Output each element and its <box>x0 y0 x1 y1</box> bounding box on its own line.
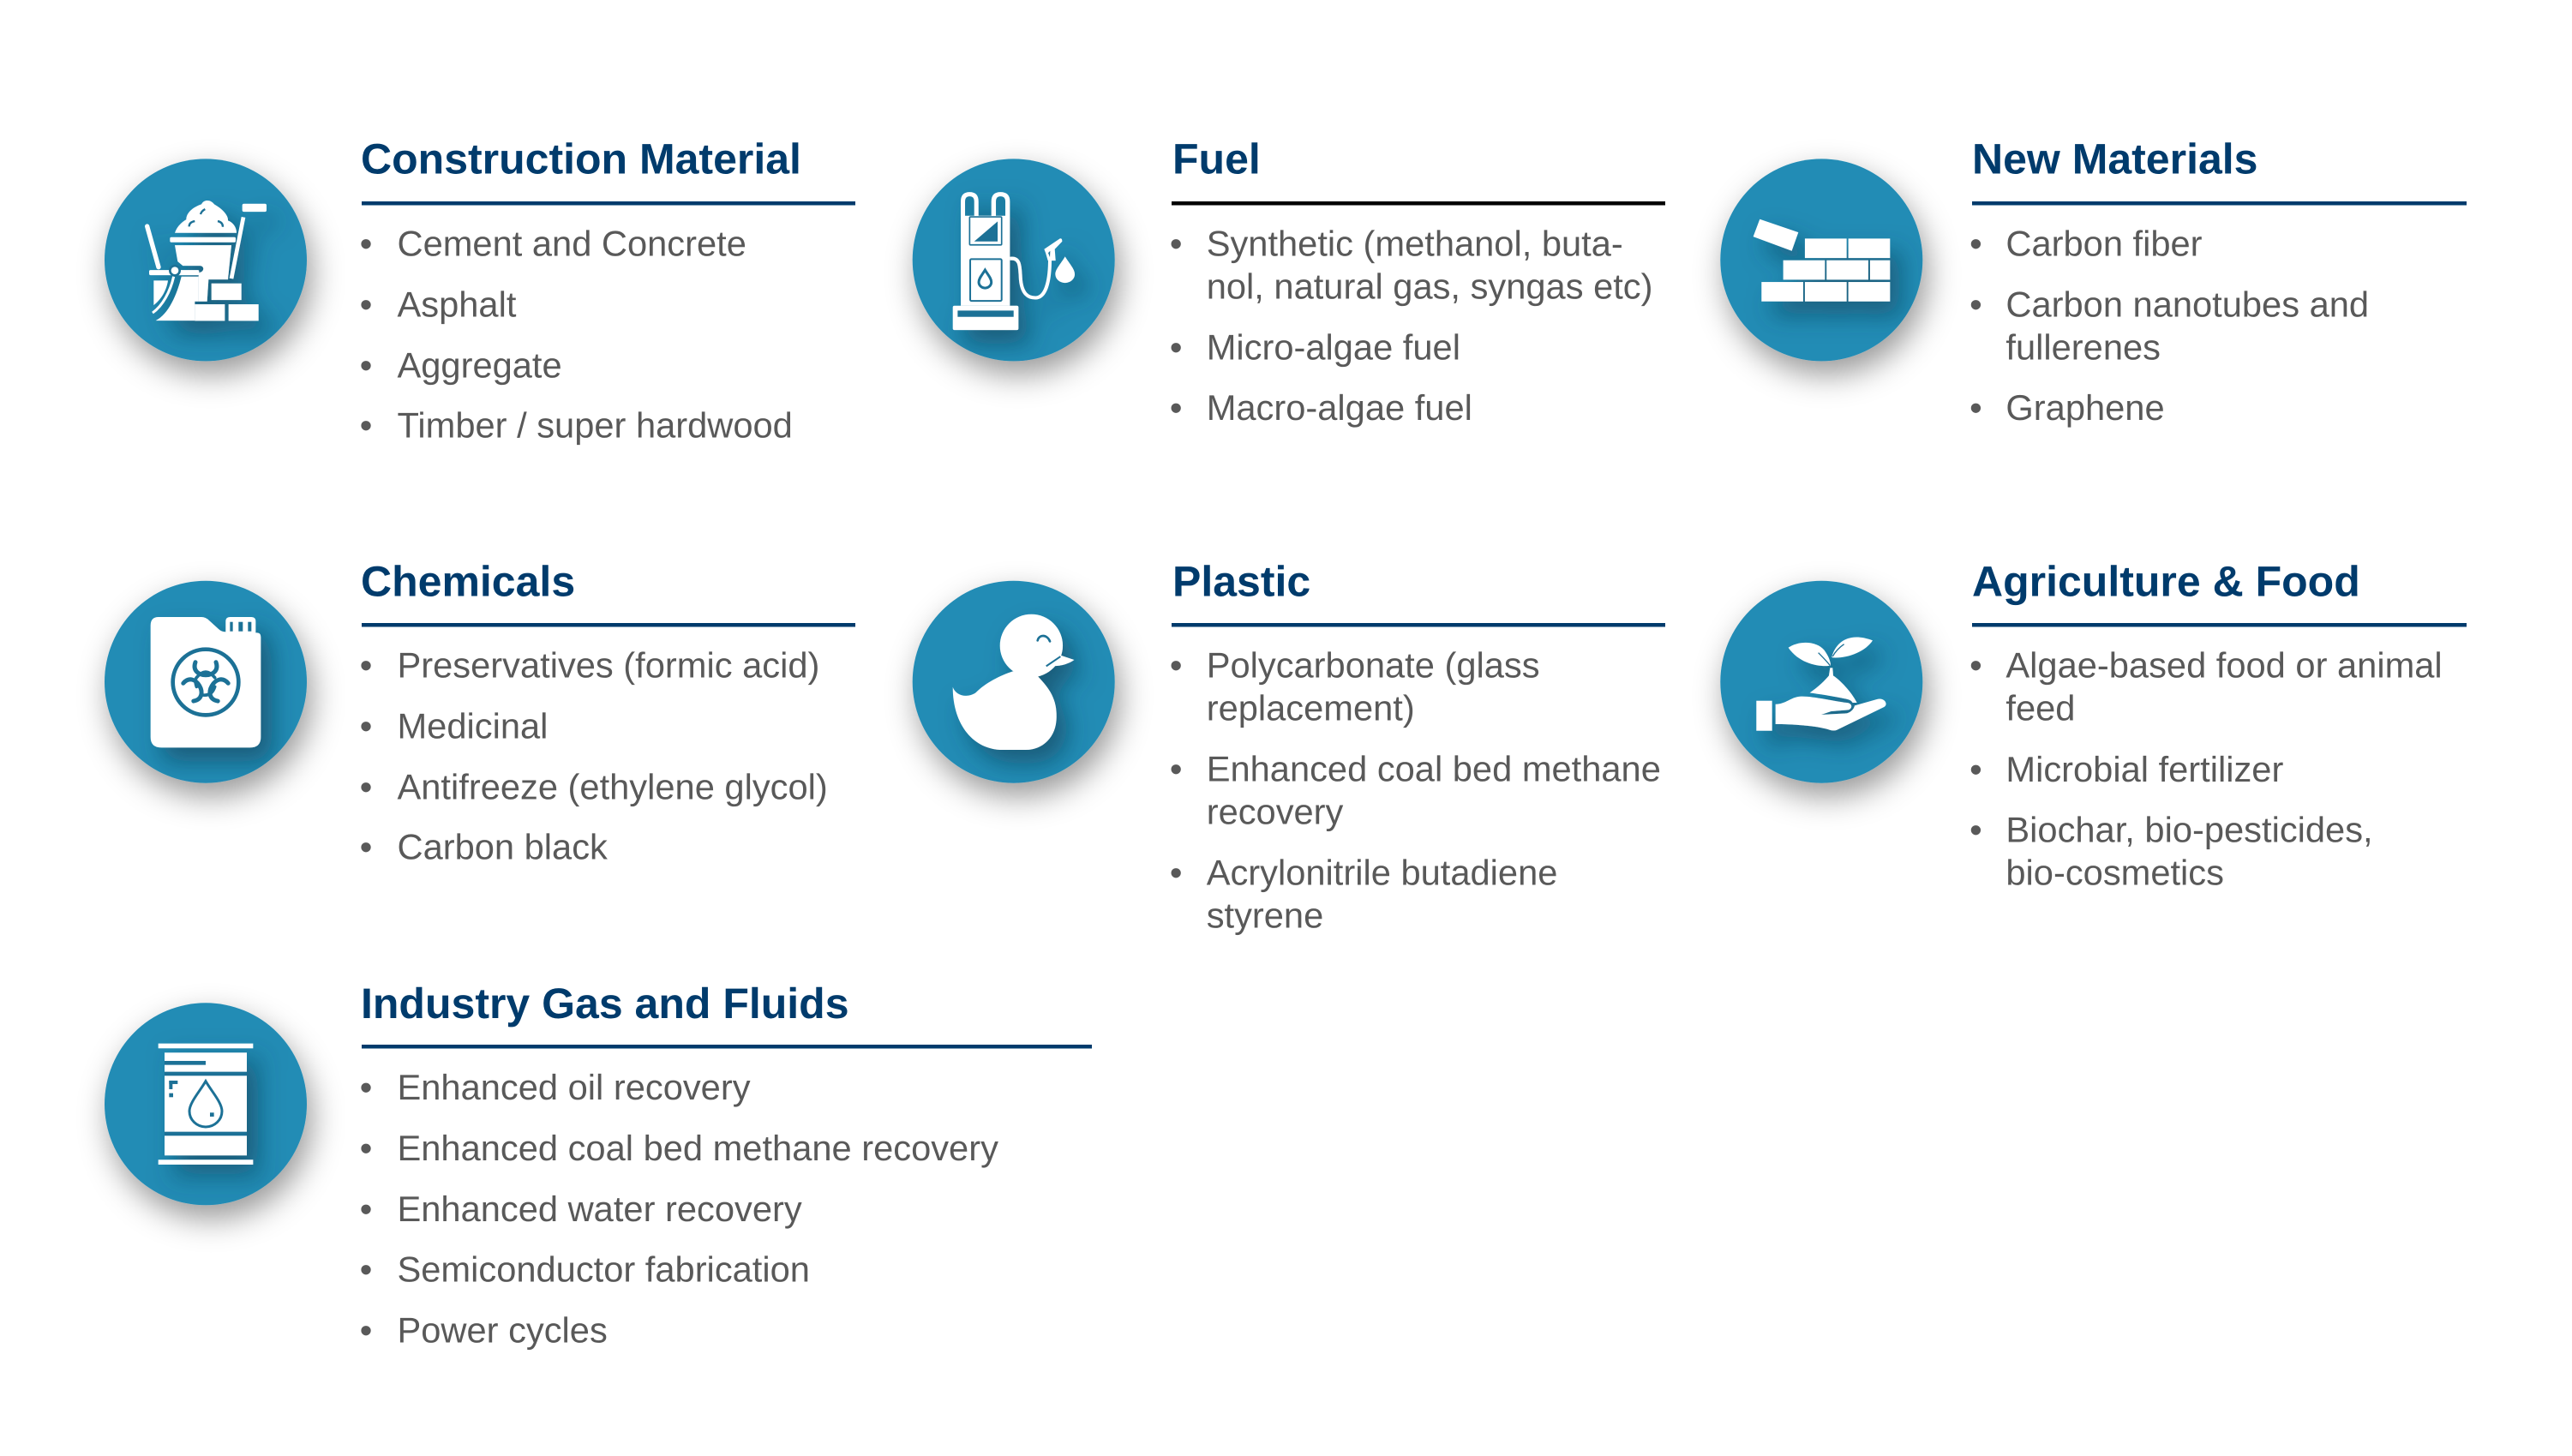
list: chemicals items: Medicinal <box>398 706 548 746</box>
list: construction items: Cement and Concrete <box>398 224 746 264</box>
list: chemicals items: • <box>360 827 372 867</box>
list: new materials items: Carbon fiber <box>2005 224 2203 264</box>
list: plastic items: Acrylonitrile butadiene <box>1207 853 1557 893</box>
list: new materials items: Carbon nanotubes and <box>2005 285 2369 325</box>
list: plastic items: Polycarbonate (glass <box>1207 645 1540 686</box>
list: construction items: Timber / super hardwood <box>398 405 793 446</box>
list: agriculture items: feed <box>2005 688 2075 728</box>
list: fuel items <box>1170 224 1652 428</box>
heading: Construction Material: Construction Material <box>361 135 801 183</box>
list: agriculture items <box>1969 645 2443 893</box>
icon: rubber duck <box>913 581 1115 783</box>
icon: brick wall <box>1720 159 1922 361</box>
panel: Agriculture & Food <box>1720 557 2467 893</box>
panel: Industry Gas and Fluids <box>105 980 1092 1351</box>
list: new materials items: • <box>1969 285 1982 325</box>
list: industry items: Enhanced oil recovery <box>398 1067 751 1107</box>
list: agriculture items: • <box>1969 749 1982 789</box>
list: plastic items: recovery <box>1207 792 1344 832</box>
list: industry items: • <box>360 1067 372 1107</box>
list: plastic items: Enhanced coal bed methane <box>1207 749 1661 789</box>
icon: oil barrel <box>105 1003 307 1205</box>
list: plastic items: • <box>1170 645 1182 686</box>
list: new materials items: • <box>1969 387 1982 428</box>
list: chemicals items: • <box>360 706 372 746</box>
panel: Chemicals <box>105 557 855 867</box>
list: chemicals items: Antifreeze (ethylene glycol) <box>398 767 828 807</box>
list: agriculture items: • <box>1969 645 1982 686</box>
heading: New Materials: New Materials <box>1972 135 2257 183</box>
list: plastic items: replacement) <box>1207 688 1415 728</box>
list: new materials items: fullerenes <box>2005 327 2161 368</box>
list: industry items <box>360 1067 998 1351</box>
list: industry items: • <box>360 1128 372 1168</box>
icon: cement bucket, broom and bricks <box>105 159 307 361</box>
list: construction items: • <box>360 405 372 446</box>
list: plastic items: • <box>1170 853 1182 893</box>
list: plastic items <box>1170 645 1661 936</box>
list: construction items: Asphalt <box>398 285 517 325</box>
list: agriculture items: Algae-based food or animal <box>2005 645 2443 686</box>
list: fuel items: • <box>1170 224 1182 264</box>
list: industry items: Power cycles <box>398 1310 608 1351</box>
list: construction items: Aggregate <box>398 345 562 386</box>
list: fuel items: • <box>1170 387 1182 428</box>
list: chemicals items: • <box>360 767 372 807</box>
list: fuel items: Synthetic (methanol, buta- <box>1207 224 1623 264</box>
list: fuel items: • <box>1170 327 1182 368</box>
list: fuel items: Macro-algae fuel <box>1207 387 1472 428</box>
icon: biohazard canister <box>105 581 307 783</box>
list: agriculture items: Biochar, bio-pesticides, <box>2005 810 2373 850</box>
list: industry items: • <box>360 1249 372 1290</box>
list: fuel items: nol, natural gas, syngas etc) <box>1207 267 1652 307</box>
list: chemicals items <box>360 645 828 867</box>
list: industry items: • <box>360 1310 372 1351</box>
icon: hand holding seedling <box>1720 581 1922 783</box>
heading: Agriculture & Food: Agriculture & Food <box>1972 557 2360 605</box>
list: fuel items: Micro-algae fuel <box>1207 327 1460 368</box>
list: plastic items: styrene <box>1207 896 1323 936</box>
list: agriculture items: • <box>1969 810 1982 850</box>
list: construction items: • <box>360 345 372 386</box>
list: construction items: • <box>360 285 372 325</box>
list: chemicals items: Preservatives (formic acid) <box>398 645 819 686</box>
heading: Chemicals: Chemicals <box>361 557 575 605</box>
list: agriculture items: bio-cosmetics <box>2005 853 2224 893</box>
list: industry items: • <box>360 1189 372 1229</box>
list: industry items: Enhanced coal bed methane recovery <box>398 1128 998 1168</box>
panel: Construction Material <box>105 135 855 446</box>
list: agriculture items: Microbial fertilizer <box>2005 749 2283 789</box>
list: chemicals items: • <box>360 645 372 686</box>
list: industry items: Semiconductor fabrication <box>398 1249 810 1290</box>
list: new materials items <box>1969 224 2369 428</box>
list: construction items <box>360 224 793 446</box>
heading: Plastic: Plastic <box>1172 557 1310 605</box>
list: new materials items: Graphene <box>2005 387 2165 428</box>
panel: Plastic <box>913 557 1665 936</box>
icon: fuel pump <box>913 159 1115 361</box>
panel: New Materials <box>1720 135 2467 428</box>
heading: Industry Gas and Fluids: Industry Gas and Fluids <box>361 980 849 1028</box>
heading: Fuel: Fuel <box>1172 135 1261 183</box>
list: industry items: Enhanced water recovery <box>398 1189 802 1229</box>
list: plastic items: • <box>1170 749 1182 789</box>
list: construction items: • <box>360 224 372 264</box>
list: new materials items: • <box>1969 224 1982 264</box>
list: chemicals items: Carbon black <box>398 827 608 867</box>
panel: Fuel <box>913 135 1665 428</box>
